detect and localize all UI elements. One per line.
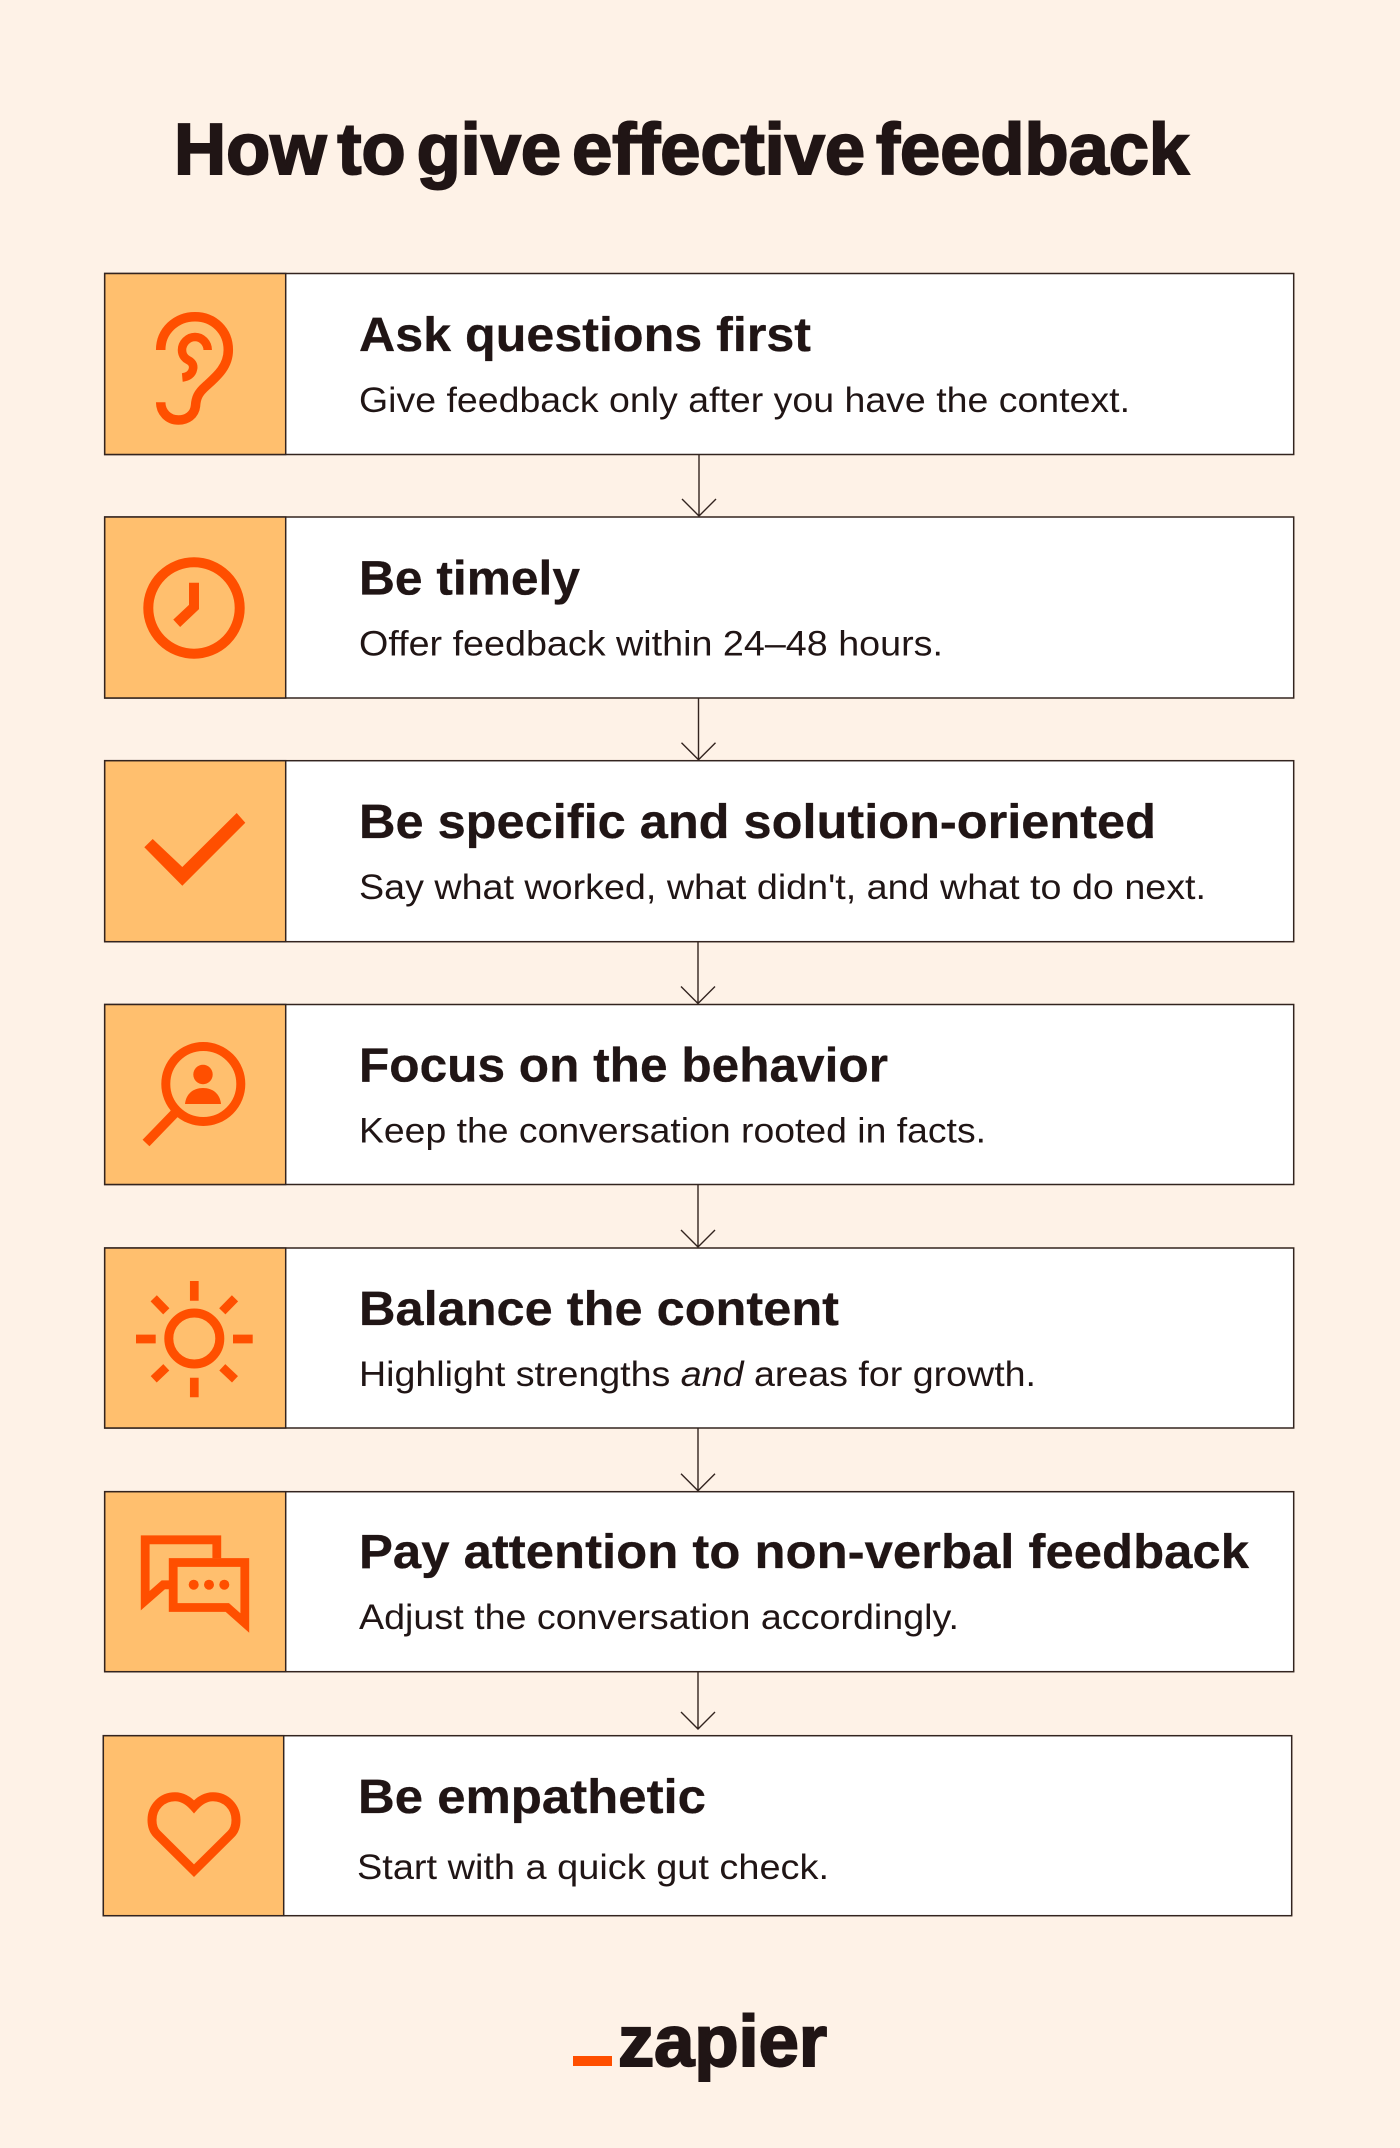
panel: be specific and solution-oriented [105,761,1294,942]
heading: Be empathetic [358,1771,706,1824]
logo: zapier: zapier [618,2002,827,2082]
heading: Be specific and solution-oriented [359,796,1156,849]
heading: Pay attention to non-verbal feedback [359,1526,1249,1579]
heading: Focus on the behavior [359,1040,888,1092]
panel: pay attention to non-verbal feedback [105,1492,1294,1672]
icon: heart [152,1797,236,1871]
icon: check mark [144,813,245,886]
panel: focus on the behavior [105,1004,1294,1184]
heading: Be timely [359,552,580,606]
arrow: step 2 to 3 [682,698,716,760]
heading: Balance the content [359,1283,839,1336]
description: Start with a quick gut check. [357,1848,829,1887]
arrow: step 4 to 5 [681,1184,715,1247]
icon: ear [161,317,228,420]
heading: Ask questions first [359,309,811,362]
icon: magnifier with person [146,1046,241,1143]
arrow: step 3 to 4 [681,942,715,1004]
description: Adjust the conversation accordingly. [359,1598,959,1637]
description: Keep the conversation rooted in facts. [359,1112,986,1150]
panel: be empathetic [103,1736,1292,1916]
description: Give feedback only after you have the context. [359,381,1130,420]
icon: clock [148,562,240,654]
arrow: step 6 to 7 [681,1672,715,1729]
icon: speech bubbles [145,1540,245,1623]
panel: balance the content [105,1248,1294,1428]
description: Offer feedback within 24–48 hours. [359,624,943,664]
panel: be timely [105,517,1294,698]
title: How to give effective feedback [174,110,1190,190]
icon: sun [136,1281,253,1397]
panel: ask questions first [105,274,1294,454]
arrow: step 1 to 2 [682,454,716,516]
arrow: step 5 to 6 [681,1428,715,1491]
description: Say what worked, what didn't, and what to do next. [359,868,1206,907]
description: Highlight strengths and areas for growth. [359,1355,1036,1394]
